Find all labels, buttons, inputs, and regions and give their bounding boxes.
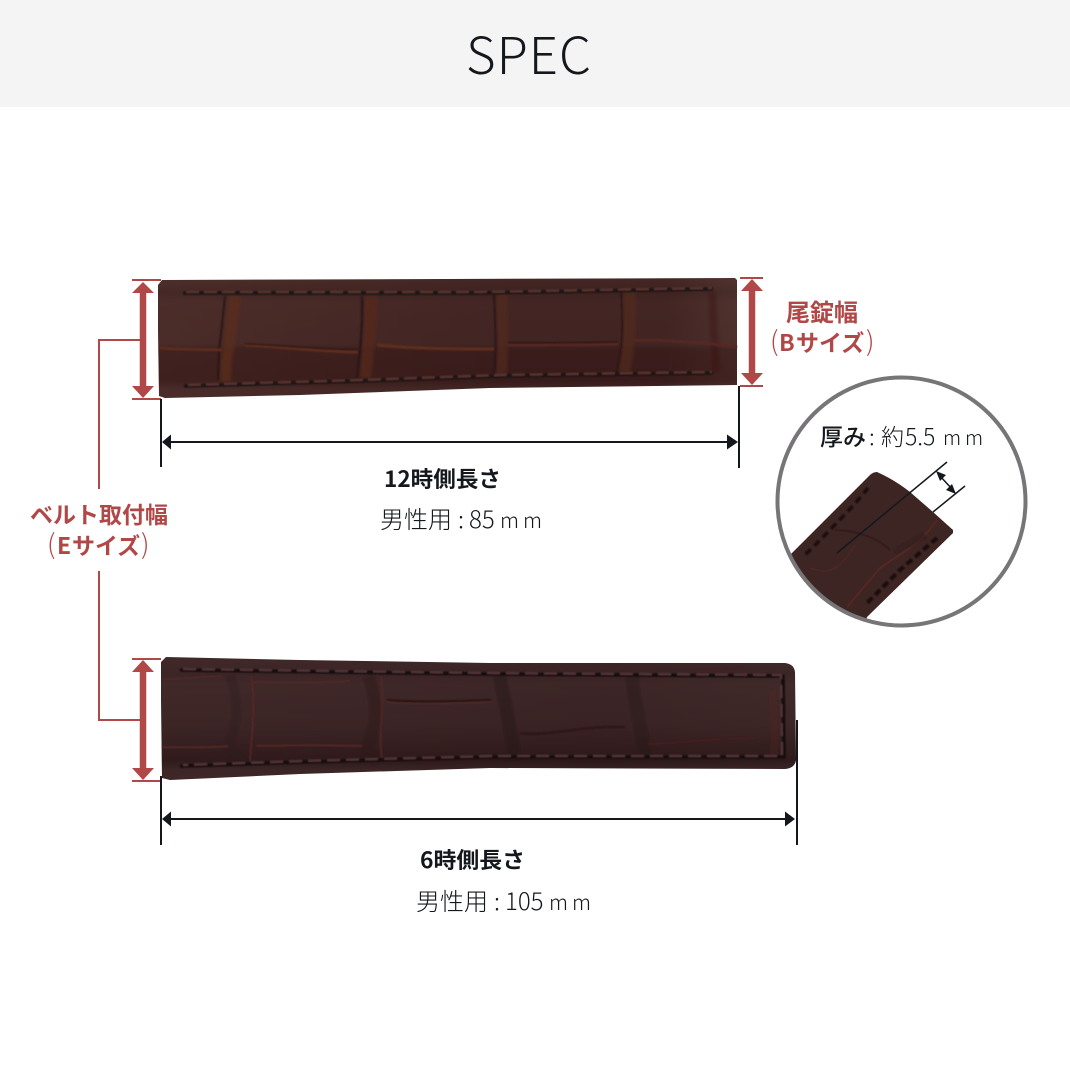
label: belt width: ): [141, 523, 150, 562]
thickness value: m: [943, 422, 961, 451]
label: buckle width: B: [779, 324, 795, 358]
label: buckle width: [770, 293, 875, 359]
title: SPEC: [466, 15, 591, 89]
strap: 12 o'clock side: [158, 278, 737, 398]
label: belt width: (: [47, 523, 56, 562]
thickness value: :: [869, 418, 875, 452]
label: belt width: E: [57, 527, 71, 561]
dimension: 6 o'clock length: [161, 720, 797, 845]
circle ring: [778, 378, 1026, 626]
header band: [0, 0, 1070, 107]
strap end photo: [791, 472, 953, 618]
value: 85mm: :: [458, 500, 464, 535]
label: buckle width: ): [866, 320, 875, 359]
label: belt width: [30, 496, 168, 562]
bracket: 6 o'clock left E size: [132, 659, 161, 781]
value: 85mm: 男性用: [380, 500, 452, 535]
thickness guide lines: [837, 462, 965, 553]
label: belt width: サイズ: [72, 527, 140, 561]
label: buckle width: 尾錠幅: [786, 293, 858, 328]
value: 105mm: :: [494, 882, 500, 917]
bracket: 12 o'clock left E size: [132, 280, 161, 399]
label: buckle width: サイズ: [796, 324, 864, 358]
dimension: 12 o'clock length: [161, 386, 739, 468]
leader line: belt width: [99, 340, 140, 720]
value: 105mm: m: [572, 887, 591, 917]
label: 12 o'clock length: 12時側長さ: [384, 462, 501, 494]
value: 85mm: m: [500, 505, 519, 535]
label: buckle width: (: [770, 320, 779, 359]
stitching: 12 o'clock strap: [183, 288, 713, 386]
bracket: 12 o'clock right B size: [740, 278, 763, 386]
value: 105mm: 105: [505, 882, 544, 917]
strap: 6 o'clock side: [161, 657, 796, 780]
value: 85mm: 85: [469, 500, 495, 535]
label: belt width: ベルト取付幅: [30, 496, 168, 530]
value: 105mm: m: [549, 887, 568, 917]
value: 85mm: m: [523, 505, 542, 535]
value: 105mm: 男性用: [416, 882, 488, 917]
thickness value: m: [965, 422, 983, 451]
callout circle: thickness: [775, 378, 1026, 640]
label: 6 o'clock length: 6時側長さ: [420, 843, 525, 875]
stitching: 6 o'clock strap: [180, 669, 784, 766]
thickness arrowheads: [936, 471, 956, 494]
thickness value: 5.5: [905, 418, 935, 452]
thickness value: 厚み: [820, 418, 866, 452]
thickness value: 約: [881, 418, 904, 452]
